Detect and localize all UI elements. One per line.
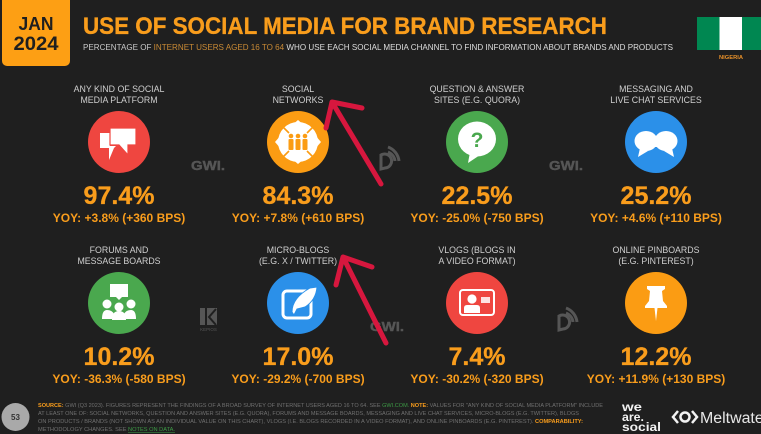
panel: social networks: 84.3% [263, 182, 333, 210]
panel: vlogs: YOY: -30.2% (-320 BPS) [410, 372, 544, 386]
panel: any kind of social media platform [53, 84, 185, 225]
watermark: GWI: GWI. [549, 158, 583, 173]
panel: micro-blogs: MICRO-BLOGS [267, 245, 329, 255]
footnote [38, 403, 603, 433]
panel: any kind of social media platform: YOY: +3.8% (+360 BPS) [53, 211, 185, 225]
panel: messaging and live chat: 25.2% [621, 182, 691, 210]
panel: any kind of social media platform: ANY KIND OF SOCIAL [74, 84, 164, 94]
arrow: pointing to social networks [326, 102, 381, 184]
logo: we are social: are. [622, 412, 644, 424]
panel: any kind of social media platform: 97.4% [84, 182, 154, 210]
footnote: METHODOLOGY CHANGES. SEE NOTES ON DATA. [38, 427, 175, 433]
panel: question and answer sites [410, 84, 544, 225]
title: USE OF SOCIAL MEDIA FOR BRAND RESEARCH [83, 13, 607, 40]
panel: social networks: NETWORKS [273, 95, 324, 105]
panel: social networks [232, 84, 364, 225]
page number: 53 [11, 413, 20, 422]
flag: Nigeria: NIGERIA [719, 55, 743, 61]
panel: question and answer sites: YOY: -25.0% (-750 BPS) [410, 211, 544, 225]
footnote: ON PRODUCTS / BRANDS (NOT SHOWN AS AN INDIVIDUAL VALUE ON THIS CHART), VLOGS (I.E. BLOGS RECORDED IN A VIDEO FORMAT), AND ONLINE PINBOARDS (E.G. PINTEREST). COMPARABILITY: [38, 419, 583, 425]
panel: vlogs: A VIDEO FORMAT) [438, 256, 516, 266]
panel: messaging and live chat: LIVE CHAT SERVICES [610, 95, 702, 105]
panel: micro-blogs: (E.G. X / TWITTER) [259, 256, 337, 266]
panel: question and answer sites: 22.5% [442, 182, 512, 210]
panel: messaging and live chat [590, 84, 722, 225]
panel: online pinboards: ONLINE PINBOARDS [612, 245, 700, 255]
panel: forums and message boards: YOY: -36.3% (-580 BPS) [52, 372, 186, 386]
date badge: JAN [18, 14, 54, 34]
watermark: Kepios: KEPIOS [200, 327, 217, 332]
watermark: signal logo [559, 308, 577, 330]
watermark: Kepios [200, 308, 217, 332]
panel: question and answer sites: SITES (E.G. QUORA) [434, 95, 520, 105]
date badge [2, 0, 70, 66]
panel: forums and message boards: MESSAGE BOARDS [77, 256, 161, 266]
panel: online pinboards: (E.G. PINTEREST) [618, 256, 694, 266]
panel: vlogs: VLOGS (BLOGS IN [438, 245, 516, 255]
panel: messaging and live chat: MESSAGING AND [619, 84, 693, 94]
panel: social networks: YOY: +7.8% (+610 BPS) [232, 211, 364, 225]
subtitle: PERCENTAGE OF INTERNET USERS AGED 16 TO 64 WHO USE EACH SOCIAL MEDIA CHANNEL TO FIND INFORMATION ABOUT BRANDS AND PRODUCTS [83, 42, 673, 52]
logo: we are social [621, 402, 661, 434]
panel: online pinboards: YOY: +11.9% (+130 BPS) [587, 372, 725, 386]
flag: Nigeria [697, 17, 761, 61]
logo: we are social: social [622, 422, 661, 434]
footnote: SOURCE: GWI (Q3 2023). FIGURES REPRESENT THE FINDINGS OF A BROAD SURVEY OF INTERNET USERS AGED 16 TO 64. SEE GWI.COM. NOTE: VALUES FOR "ANY KIND OF SOCIAL MEDIA PLATFORM" INCLUDE [38, 403, 603, 409]
panel: forums and message boards [52, 245, 186, 386]
panel: messaging and live chat: YOY: +4.6% (+110 BPS) [590, 211, 722, 225]
panel: forums and message boards: 10.2% [84, 343, 154, 371]
panel: online pinboards: 12.2% [621, 343, 691, 371]
logo: we are social: we [621, 402, 642, 414]
panel: any kind of social media platform: MEDIA PLATFORM [80, 95, 158, 105]
arrow: pointing to micro-blogs [336, 257, 386, 343]
watermark: signal logo [381, 147, 399, 169]
panel: social networks: SOCIAL [282, 84, 314, 94]
watermark: GWI: GWI. [191, 158, 225, 173]
panel: micro-blogs [231, 245, 365, 386]
footnote: AT LEAST ONE OF: SOCIAL NETWORKS, QUESTION AND ANSWER SITES (E.G. QUORA), FORUMS AND MESSAGE BOARDS, MESSAGING AND LIVE CHAT SERVICES, MICRO-BLOGS (E.G. TWITTER), BLOGS [38, 411, 579, 417]
panel: micro-blogs: YOY: -29.2% (-700 BPS) [231, 372, 365, 386]
panel: question and answer sites: QUESTION & ANSWER [430, 84, 524, 94]
panel: vlogs: 7.4% [449, 343, 505, 371]
panel: online pinboards [587, 245, 725, 386]
page number [2, 403, 30, 431]
watermark: GWI: GWI. [370, 319, 404, 334]
date badge: 2024 [14, 34, 59, 55]
panel: micro-blogs: 17.0% [263, 343, 333, 371]
panel: vlogs [410, 245, 544, 386]
panel: forums and message boards: FORUMS AND [90, 245, 148, 255]
panel: question and answer sites: ? [471, 129, 483, 152]
logo: Meltwater [673, 410, 761, 427]
